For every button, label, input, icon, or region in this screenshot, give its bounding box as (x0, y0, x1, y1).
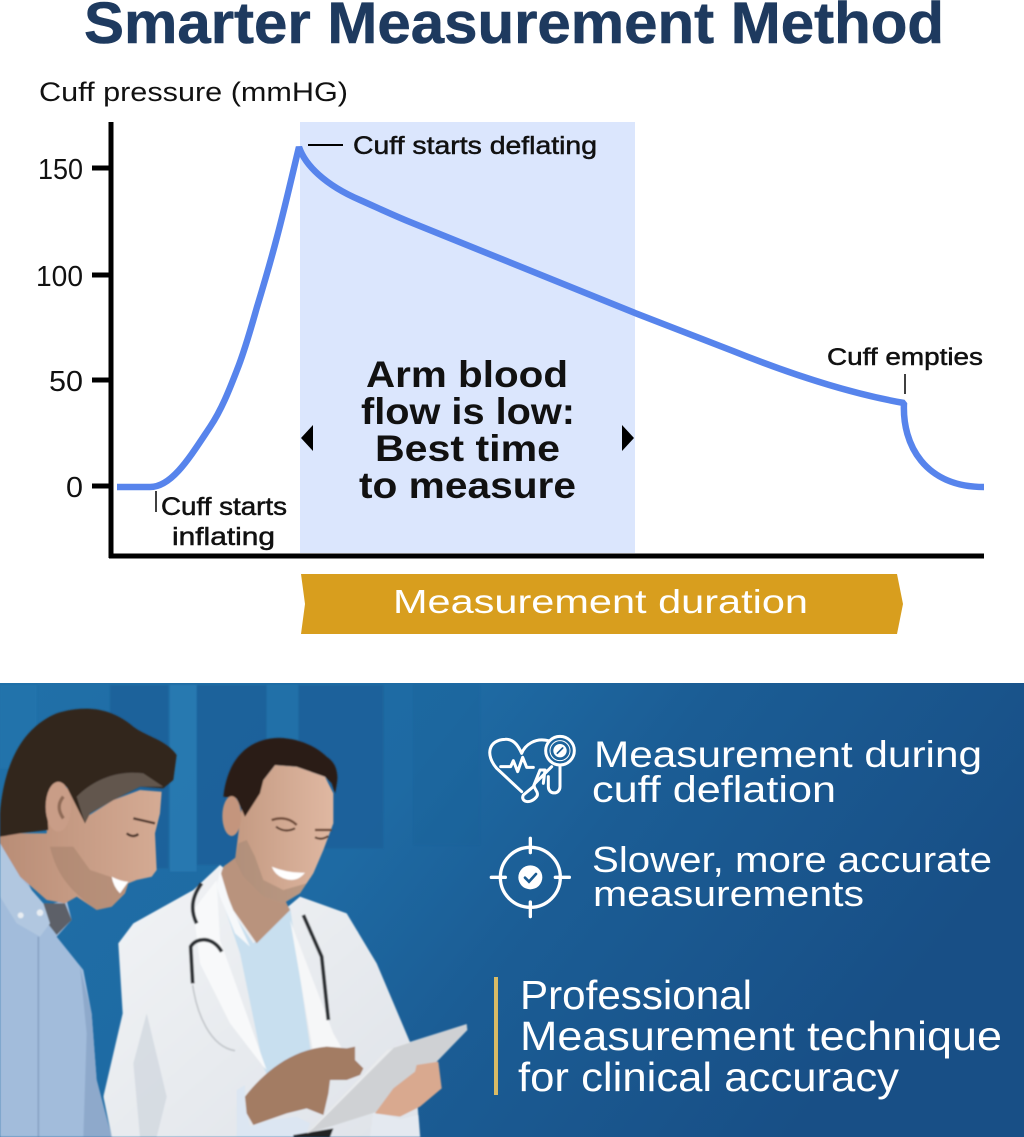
callout: professional technique: for clinical accuracy (518, 1054, 900, 1100)
y axis labels (36, 154, 83, 504)
hand and tablet (237, 1024, 467, 1137)
pressure curve (117, 147, 984, 487)
axes and ticks (92, 122, 984, 558)
arrow: right (622, 425, 634, 451)
arrow: left (301, 425, 313, 451)
callout: professional technique (494, 972, 1002, 1100)
panel: bottom blue section (0, 683, 1024, 1137)
band callout text: Arm blood (366, 354, 568, 395)
feature: slower, more accurate: measurements (593, 873, 864, 914)
chart: cuff pressure over time (36, 77, 984, 558)
feature: measurement during cuff deflation: Measurement during (594, 734, 982, 775)
feature: measurement during cuff deflation (490, 734, 982, 810)
annotation: cuff starts inflating (156, 491, 287, 551)
band callout text (359, 354, 576, 506)
band callout text: Best time (375, 428, 560, 469)
feature: slower, more accurate: Slower, more accurate (592, 839, 992, 880)
feature: measurement during cuff deflation: cuff deflation (592, 769, 836, 810)
highlighted band: best time to measure (300, 122, 635, 553)
annotation: cuff starts inflating: inflating (172, 523, 275, 551)
band callout text: flow is low: (361, 391, 575, 432)
feature: slower, more accurate (491, 838, 992, 917)
icon: target with check (491, 838, 569, 917)
background window shapes (0, 685, 480, 872)
band callout text: to measure (359, 465, 576, 506)
y axis labels: 100 (36, 261, 83, 293)
callout: professional technique: Measurement technique (520, 1013, 1002, 1059)
callout: professional technique: Professional (520, 972, 752, 1018)
y axis labels: 150 (38, 154, 83, 186)
annotation: cuff starts deflating: Cuff starts deflating (353, 132, 597, 160)
annotation: cuff empties: Cuff empties (827, 344, 983, 371)
doctor (103, 738, 467, 1137)
annotation: cuff starts inflating: Cuff starts (161, 493, 287, 521)
photo: patient and doctor (0, 709, 467, 1137)
measurement duration bar (301, 574, 903, 634)
measurement duration bar: Measurement duration (393, 583, 808, 620)
patient (0, 709, 177, 1137)
y axis title: Cuff pressure (mmHG) (39, 77, 348, 107)
y axis labels: 50 (49, 366, 83, 398)
stethoscope (191, 883, 328, 1020)
icon: heart and gauge (490, 736, 574, 802)
y axis labels: 0 (66, 472, 83, 504)
